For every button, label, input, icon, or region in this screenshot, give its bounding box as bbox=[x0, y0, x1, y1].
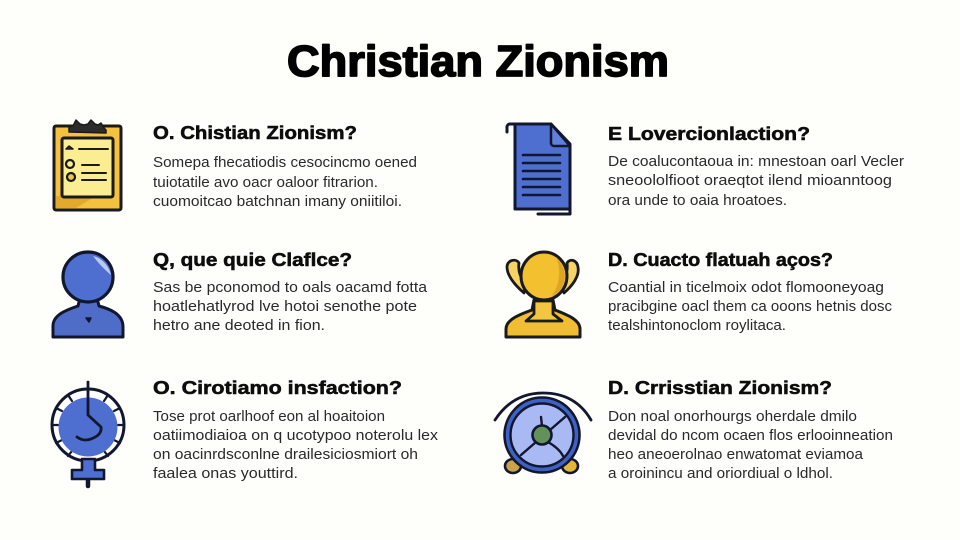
text block bbox=[608, 154, 904, 209]
text block: Coantial in ticelmoix odot flomooneyoag bbox=[608, 280, 884, 296]
text block: heo aneoerolnao enwatomat eviamoa bbox=[608, 447, 864, 463]
text block: devidal do ncom ocaen flos erlooinneation bbox=[608, 428, 893, 444]
text block bbox=[608, 280, 892, 334]
icon: person bust bbox=[53, 252, 123, 337]
text block: on oacinrdsconlne drailesiciosmiort oh bbox=[153, 447, 418, 463]
text block: a oroinincu and oriordiual o ldhol. bbox=[608, 466, 833, 482]
text block: pracibgine oacl them ca ooons hetnis dosc bbox=[608, 299, 892, 315]
heading: O. Chistian Zionism? bbox=[153, 122, 357, 143]
text block: hetro ane deoted in fion. bbox=[153, 318, 325, 334]
text block: hoatlehatlyrod lve hotoi senothe pote bbox=[153, 299, 417, 315]
text block bbox=[153, 155, 417, 210]
icon: trophy bbox=[506, 252, 580, 337]
text block: De coalucontaoua in: mnestoan oarl Vecler bbox=[608, 154, 904, 170]
icon: document bbox=[507, 124, 570, 214]
icon: globe clock on stand bbox=[52, 382, 124, 486]
panel: middle right item bbox=[506, 249, 892, 337]
panel: top left item bbox=[54, 120, 417, 210]
text block: Don noal onorhourgs oherdale dmilo bbox=[608, 409, 857, 425]
text block: tealshintonoclom roylitaca. bbox=[608, 318, 786, 334]
text block: cuomoitcao batchnan imany oniitiloi. bbox=[153, 194, 402, 210]
text block: Sas be pconomod to oals oacamd fotta bbox=[153, 280, 428, 296]
panel: top right item bbox=[507, 123, 904, 214]
text block: ora unde to oaia hroatoes. bbox=[608, 193, 787, 209]
icon: clipboard checklist bbox=[54, 120, 121, 210]
panel: bottom right item bbox=[495, 377, 893, 482]
heading: D. Cuacto flatuah aços? bbox=[608, 249, 833, 270]
text block bbox=[153, 409, 439, 482]
text block bbox=[153, 280, 428, 334]
text block: sneoololfioot oraeqtot ilend mioanntoog bbox=[608, 173, 892, 189]
panel: middle left item bbox=[53, 249, 428, 337]
text block: faalea onas youttird. bbox=[153, 466, 298, 482]
heading: E Lovercionlaction? bbox=[608, 123, 810, 144]
panel: bottom left item bbox=[52, 377, 439, 486]
heading: D. Crrisstian Zionism? bbox=[608, 377, 832, 398]
heading: Q, que quie Claflce? bbox=[153, 249, 352, 270]
text block: oatiimodiaioa on q ucotypoo noterolu lex bbox=[153, 428, 439, 444]
icon: compass wheel bbox=[495, 393, 591, 473]
text block: tuiotatile avo oacr oaloor fitrarion. bbox=[153, 175, 378, 191]
text block: Somepa fhecatiodis cesocincmo oened bbox=[153, 155, 417, 171]
title: Christian Zionism bbox=[287, 37, 669, 86]
text block bbox=[608, 409, 893, 482]
text block: Tose prot oarlhoof eon al hoaitoion bbox=[153, 409, 385, 425]
heading: O. Cirotiamo insfaction? bbox=[153, 377, 402, 398]
